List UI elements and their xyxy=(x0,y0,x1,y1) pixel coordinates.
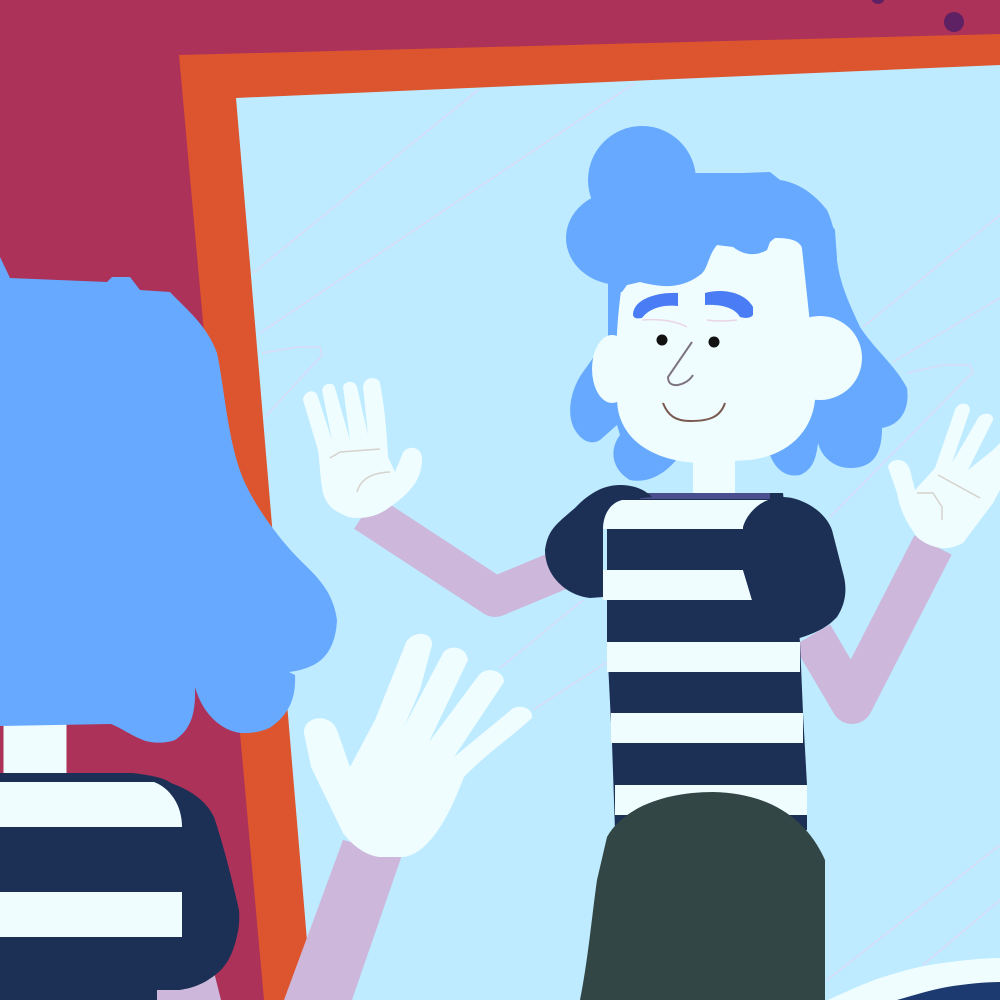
reflection neck xyxy=(693,440,735,496)
foreground object inner xyxy=(897,982,1000,1000)
reflection eyebrows xyxy=(633,291,753,318)
reflection hand right xyxy=(888,404,1000,548)
foreground shirt xyxy=(0,773,239,1000)
foreground shirt stripes xyxy=(0,782,182,937)
reflection trousers xyxy=(580,792,825,1000)
foreground hair xyxy=(0,257,337,743)
foreground arm xyxy=(284,840,402,1000)
reflection top hair xyxy=(566,126,838,322)
foreground neck xyxy=(4,715,66,777)
reflection shirt stripes xyxy=(603,500,807,815)
reflection arm right xyxy=(812,545,933,703)
mirror glare lines xyxy=(253,83,1000,980)
reflection shirt xyxy=(607,493,807,830)
reflection hand left xyxy=(303,378,422,518)
mirror glass xyxy=(236,65,1000,1000)
reflection collar line xyxy=(640,493,770,499)
foreground object rim xyxy=(828,958,1000,1000)
foreground hand xyxy=(304,634,532,857)
reflection sleeves xyxy=(545,485,845,642)
reflection face xyxy=(616,230,815,463)
foreground lower arm sliver xyxy=(150,972,221,1000)
reflection palm lines xyxy=(330,449,980,520)
reflection face details xyxy=(642,320,737,421)
mirror frame xyxy=(179,34,1000,1000)
reflection eyes xyxy=(656,334,720,348)
reflection back hair xyxy=(570,200,908,481)
reflection figure xyxy=(303,126,1000,1000)
reflection arm left xyxy=(365,512,560,597)
foreground figure seen from behind xyxy=(0,257,532,1000)
reflection ears xyxy=(592,316,862,403)
wall dots xyxy=(871,0,964,32)
